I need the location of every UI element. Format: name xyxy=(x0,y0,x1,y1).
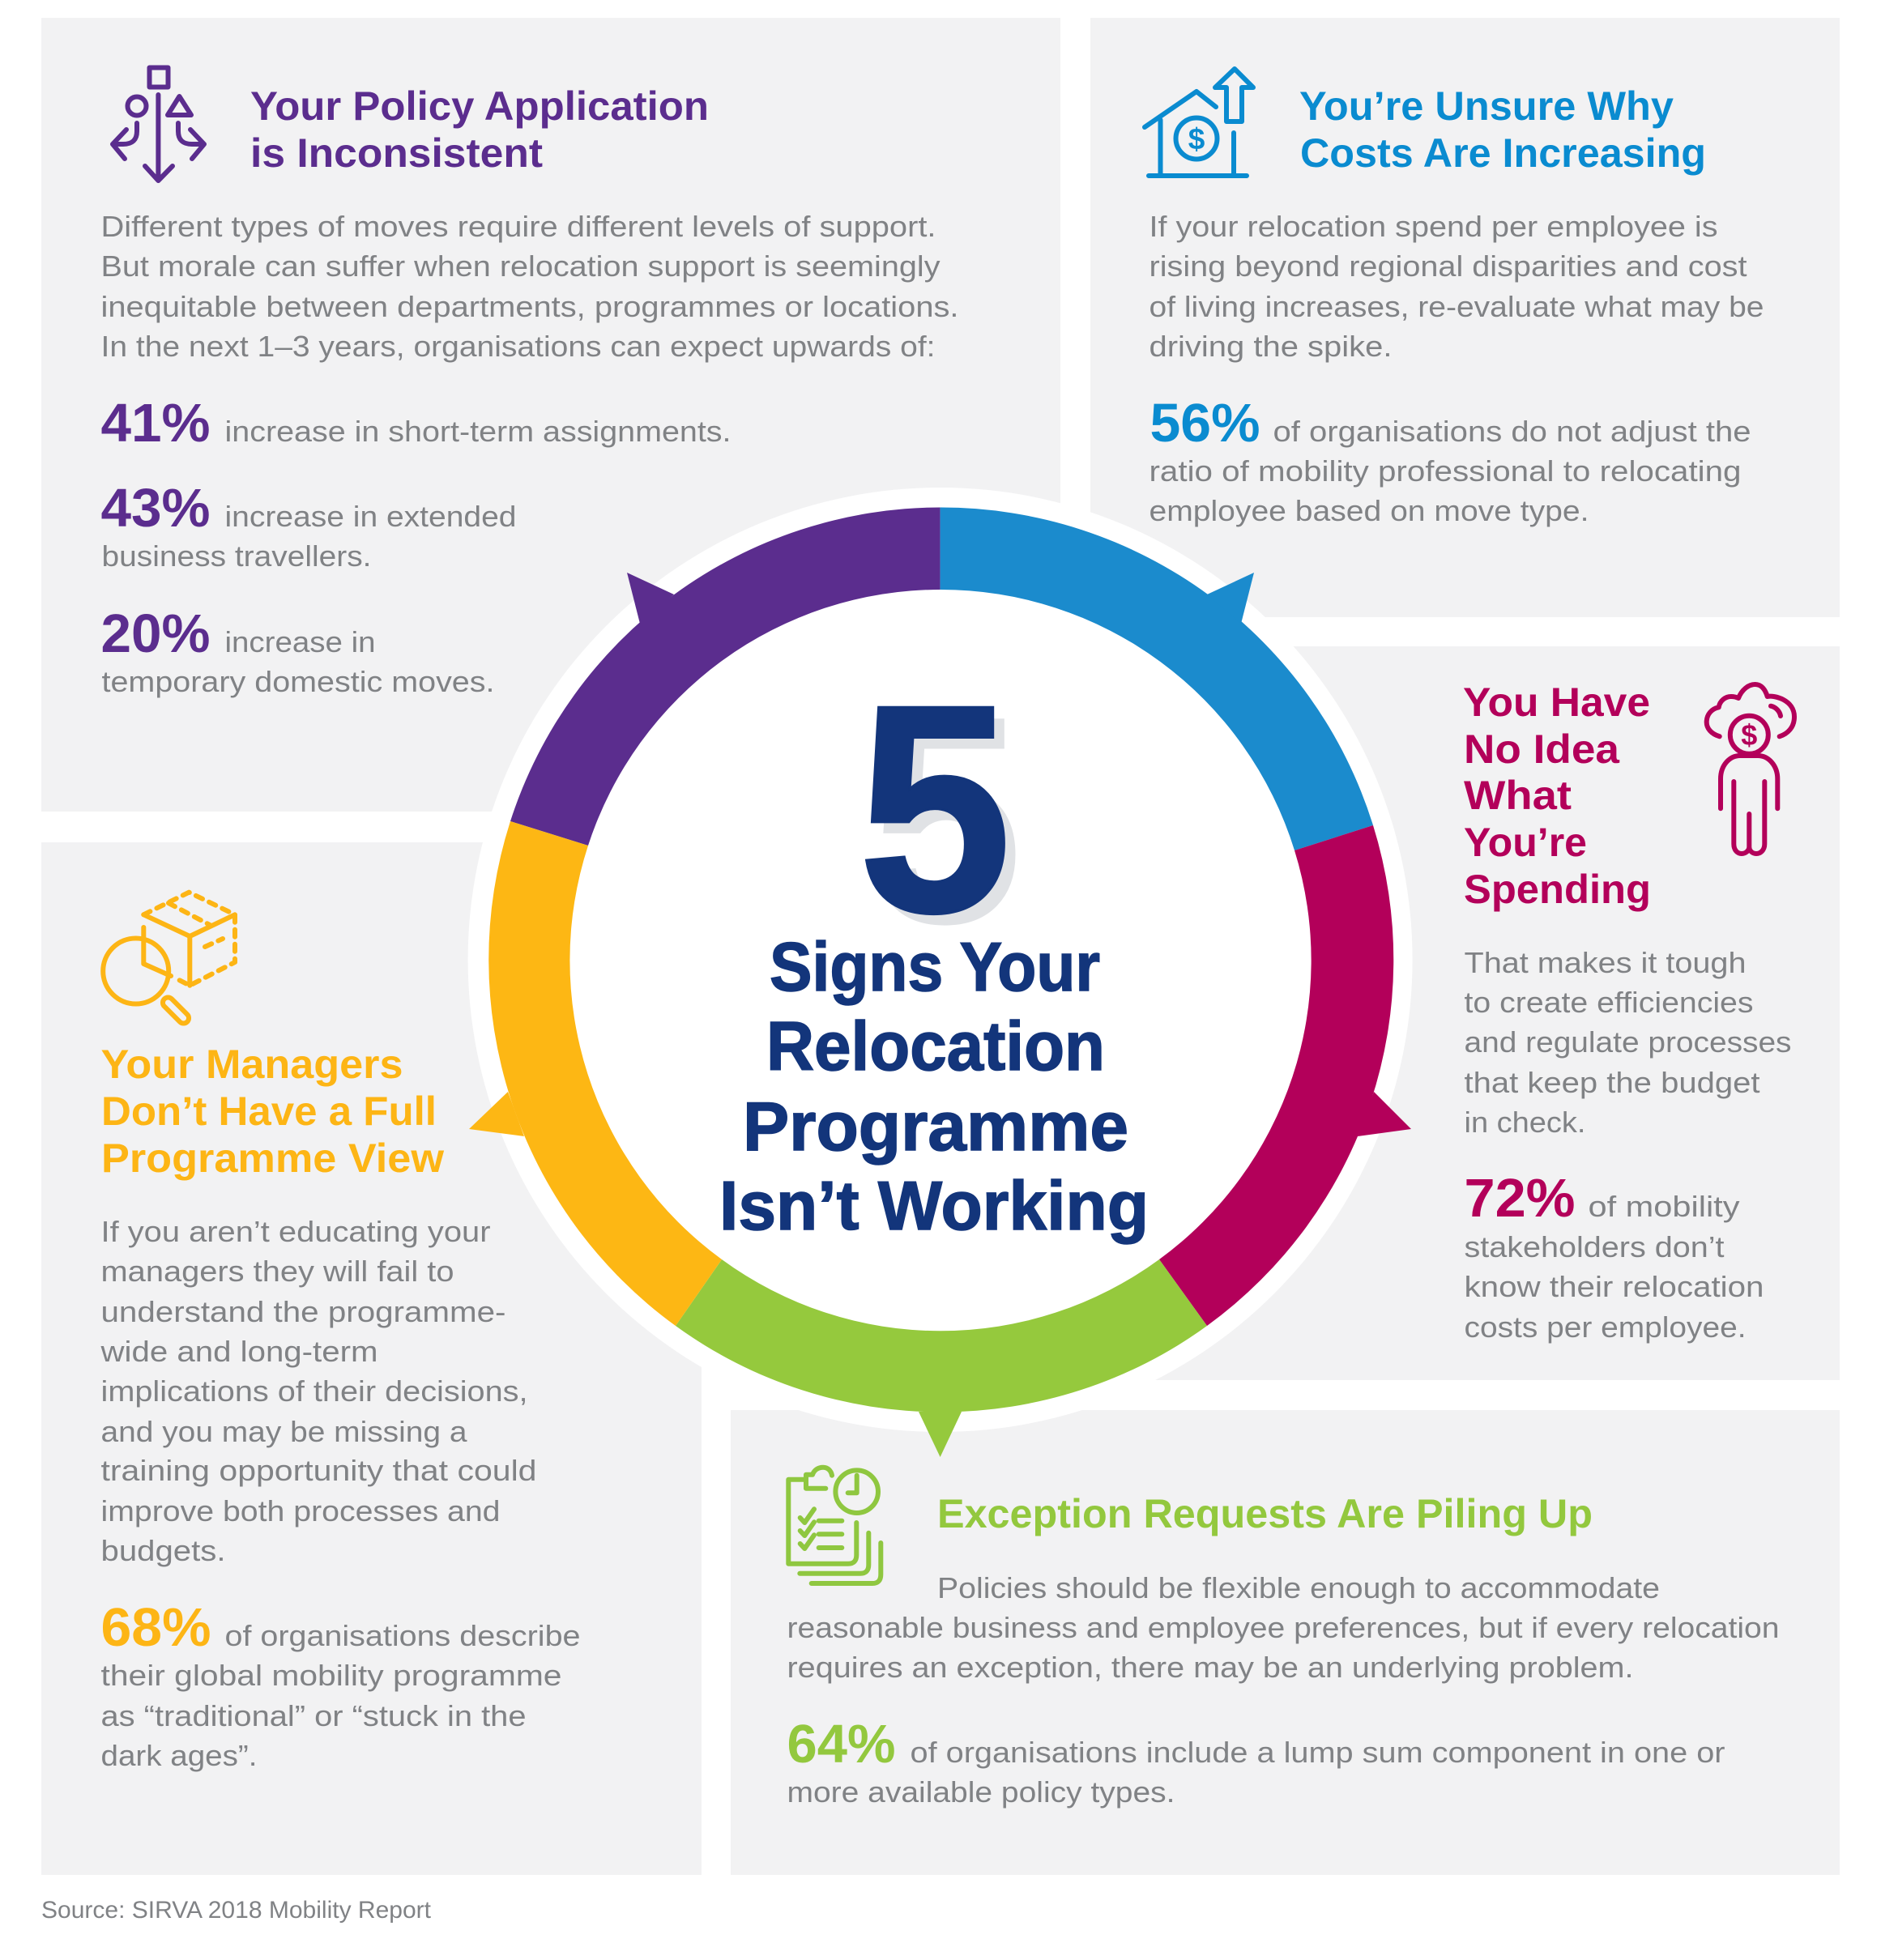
stat: 72%: know their relocation xyxy=(1465,1270,1764,1303)
heading: you have no idea what you're spending xyxy=(1463,680,1651,912)
ring segment: green with arrow xyxy=(676,1259,1207,1457)
panel: managers programme view xyxy=(41,842,702,1875)
stat: 20% xyxy=(100,603,494,698)
heading: your managers don't have a full programme view: Your Managers xyxy=(100,1042,403,1087)
body text: policy application xyxy=(100,210,959,363)
body text: managers: improve both processes and xyxy=(100,1494,501,1528)
heading: you have no idea what you're spending: You’re xyxy=(1464,820,1587,865)
stat: 41%: 41% xyxy=(100,393,211,454)
stat: 64%: 64% xyxy=(787,1714,896,1775)
body text: managers: implications of their decisions, xyxy=(100,1374,528,1408)
heading: you're unsure why costs are increasing: Costs Are Increasing xyxy=(1300,130,1706,176)
heading: you're unsure why costs are increasing xyxy=(1299,83,1706,176)
heading: your managers don't have a full programme view: Programme View xyxy=(101,1136,444,1181)
body text: exception requests: requires an exception, there may be an underlying problem. xyxy=(787,1651,1633,1684)
stat: 72%: stakeholders don’t xyxy=(1465,1230,1724,1263)
centre title: Relocation xyxy=(766,1008,1105,1085)
stat: 72%: of mobility xyxy=(1588,1190,1740,1223)
stat: 72%: costs per employee. xyxy=(1465,1310,1747,1344)
body text: managers: budgets. xyxy=(100,1534,225,1567)
body text: policy application: inequitable between departments, programmes or locations. xyxy=(100,290,959,323)
stat: 56% xyxy=(1149,393,1751,527)
ring diagram with centre title xyxy=(468,488,1413,1457)
icon: house with dollar and up arrow: $ xyxy=(1188,122,1205,156)
icon: house with dollar and up arrow xyxy=(1145,69,1253,176)
body text: costs increasing xyxy=(1149,210,1764,363)
heading: you have no idea what you're spending: Spending xyxy=(1464,867,1651,912)
ring segment: purple with arrow xyxy=(510,507,940,846)
heading: exception requests are piling up: Exception Requests Are Piling Up xyxy=(937,1491,1593,1536)
body text: policy application: But morale can suffer when relocation support is seemingly xyxy=(100,249,940,283)
centre numeral: 5: 5 xyxy=(858,643,1012,974)
heading: you have no idea what you're spending: You Have xyxy=(1463,680,1650,725)
body text: costs increasing: rising beyond regional disparities and cost xyxy=(1149,249,1747,283)
stat: 68%: as “traditional” or “stuck in the xyxy=(100,1699,527,1732)
stat: 43%: business travellers. xyxy=(102,539,371,573)
body text: spending: in check. xyxy=(1465,1106,1586,1139)
icon: person with dollar head and cloud: $ xyxy=(1741,718,1757,752)
stat: 64%: of organisations include a lump sum component in one or xyxy=(911,1736,1725,1769)
stat: 68%: of organisations describe xyxy=(225,1619,580,1652)
body text: managers: managers they will fail to xyxy=(100,1255,454,1288)
stat: 72%: 72% xyxy=(1465,1168,1575,1229)
stat: 64%: more available policy types. xyxy=(787,1775,1175,1809)
stat: 68%: their global mobility programme xyxy=(100,1659,562,1692)
body text: managers: training opportunity that could xyxy=(100,1454,536,1487)
icon: person with dollar head and cloud xyxy=(1707,684,1794,854)
body text: policy application: Different types of moves require different levels of support. xyxy=(100,210,936,243)
source note: Source: SIRVA 2018 Mobility Report xyxy=(41,1897,432,1924)
body text: spending: to create efficiencies xyxy=(1465,986,1753,1019)
heading: your managers don't have a full programme view xyxy=(100,1042,444,1181)
stat: 68%: 68% xyxy=(100,1597,211,1658)
stat: 56%: of organisations do not adjust the xyxy=(1273,415,1751,448)
body text: exception requests: reasonable business and employee preferences, but if every relocation xyxy=(787,1611,1779,1644)
body text: spending: that keep the budget xyxy=(1465,1066,1759,1099)
stat: 41% xyxy=(100,393,731,454)
centre title xyxy=(719,929,1149,1245)
body text: managers: wide and long-term xyxy=(100,1335,377,1368)
stat: 20%: temporary domestic moves. xyxy=(102,665,494,698)
heading: your policy application is inconsistent: is Inconsistent xyxy=(250,130,543,176)
centre title: Programme xyxy=(743,1089,1128,1165)
heading: you have no idea what you're spending: What xyxy=(1464,773,1572,818)
body text: costs increasing: of living increases, re-evaluate what may be xyxy=(1149,290,1764,323)
body text: managers xyxy=(100,1215,536,1567)
ring segment: yellow with arrow xyxy=(469,821,722,1326)
heading: your policy application is inconsistent xyxy=(250,83,709,176)
stat: 43% xyxy=(100,478,517,573)
body text: managers: If you aren’t educating your xyxy=(100,1215,491,1248)
heading: you have no idea what you're spending: No Idea xyxy=(1464,726,1620,772)
body text: spending xyxy=(1465,946,1792,1139)
centre numeral: 5: 5 xyxy=(869,654,1023,986)
stat: 72% xyxy=(1465,1168,1764,1344)
panel: no idea what you're spending xyxy=(1134,646,1840,1380)
ring segment: blue with arrow xyxy=(940,507,1373,850)
stat: 43%: increase in extended xyxy=(225,500,517,533)
body text: costs increasing: If your relocation spend per employee is xyxy=(1149,210,1717,243)
panel: costs increasing xyxy=(1090,18,1840,617)
stat: 20%: increase in xyxy=(225,625,376,658)
body text: costs increasing: driving the spike. xyxy=(1149,330,1392,363)
stat: 56%: employee based on move type. xyxy=(1149,494,1589,527)
body text: exception requests: Policies should be flexible enough to accommodate xyxy=(937,1571,1660,1604)
body text: spending: and regulate processes xyxy=(1465,1025,1792,1059)
centre title: Signs Your xyxy=(770,929,1100,1006)
stat: 43%: 43% xyxy=(100,478,211,539)
ring segment: magenta with arrow xyxy=(1159,825,1411,1326)
heading: your policy application is inconsistent: Your Policy Application xyxy=(250,83,709,129)
body text: exception requests xyxy=(787,1571,1779,1684)
heading: you're unsure why costs are increasing: You’re Unsure Why xyxy=(1299,83,1674,129)
icon: diverging arrows and shapes xyxy=(113,68,204,181)
stat: 64% xyxy=(787,1714,1725,1809)
panel: policy application xyxy=(41,18,1060,812)
body text: policy application: In the next 1–3 years, organisations can expect upwards of: xyxy=(100,330,935,363)
stat: 68%: dark ages”. xyxy=(100,1739,258,1772)
heading: your managers don't have a full programme view: Don’t Have a Full xyxy=(101,1089,437,1134)
stat: 56%: ratio of mobility professional to relocating xyxy=(1149,454,1742,488)
body text: spending: That makes it tough xyxy=(1465,946,1747,979)
stat: 20%: 20% xyxy=(100,603,211,664)
icon: magnifier and dashed box xyxy=(103,893,235,1025)
stat: 41%: increase in short-term assignments. xyxy=(225,415,731,448)
panel: exception requests xyxy=(731,1410,1840,1875)
body text: managers: and you may be missing a xyxy=(100,1415,468,1448)
body text: managers: understand the programme- xyxy=(100,1295,505,1328)
centre title: Isn’t Working xyxy=(719,1168,1149,1245)
stat: 56%: 56% xyxy=(1150,393,1260,454)
icon: clipboard with clock xyxy=(788,1468,881,1583)
stat: 68% xyxy=(100,1597,580,1772)
